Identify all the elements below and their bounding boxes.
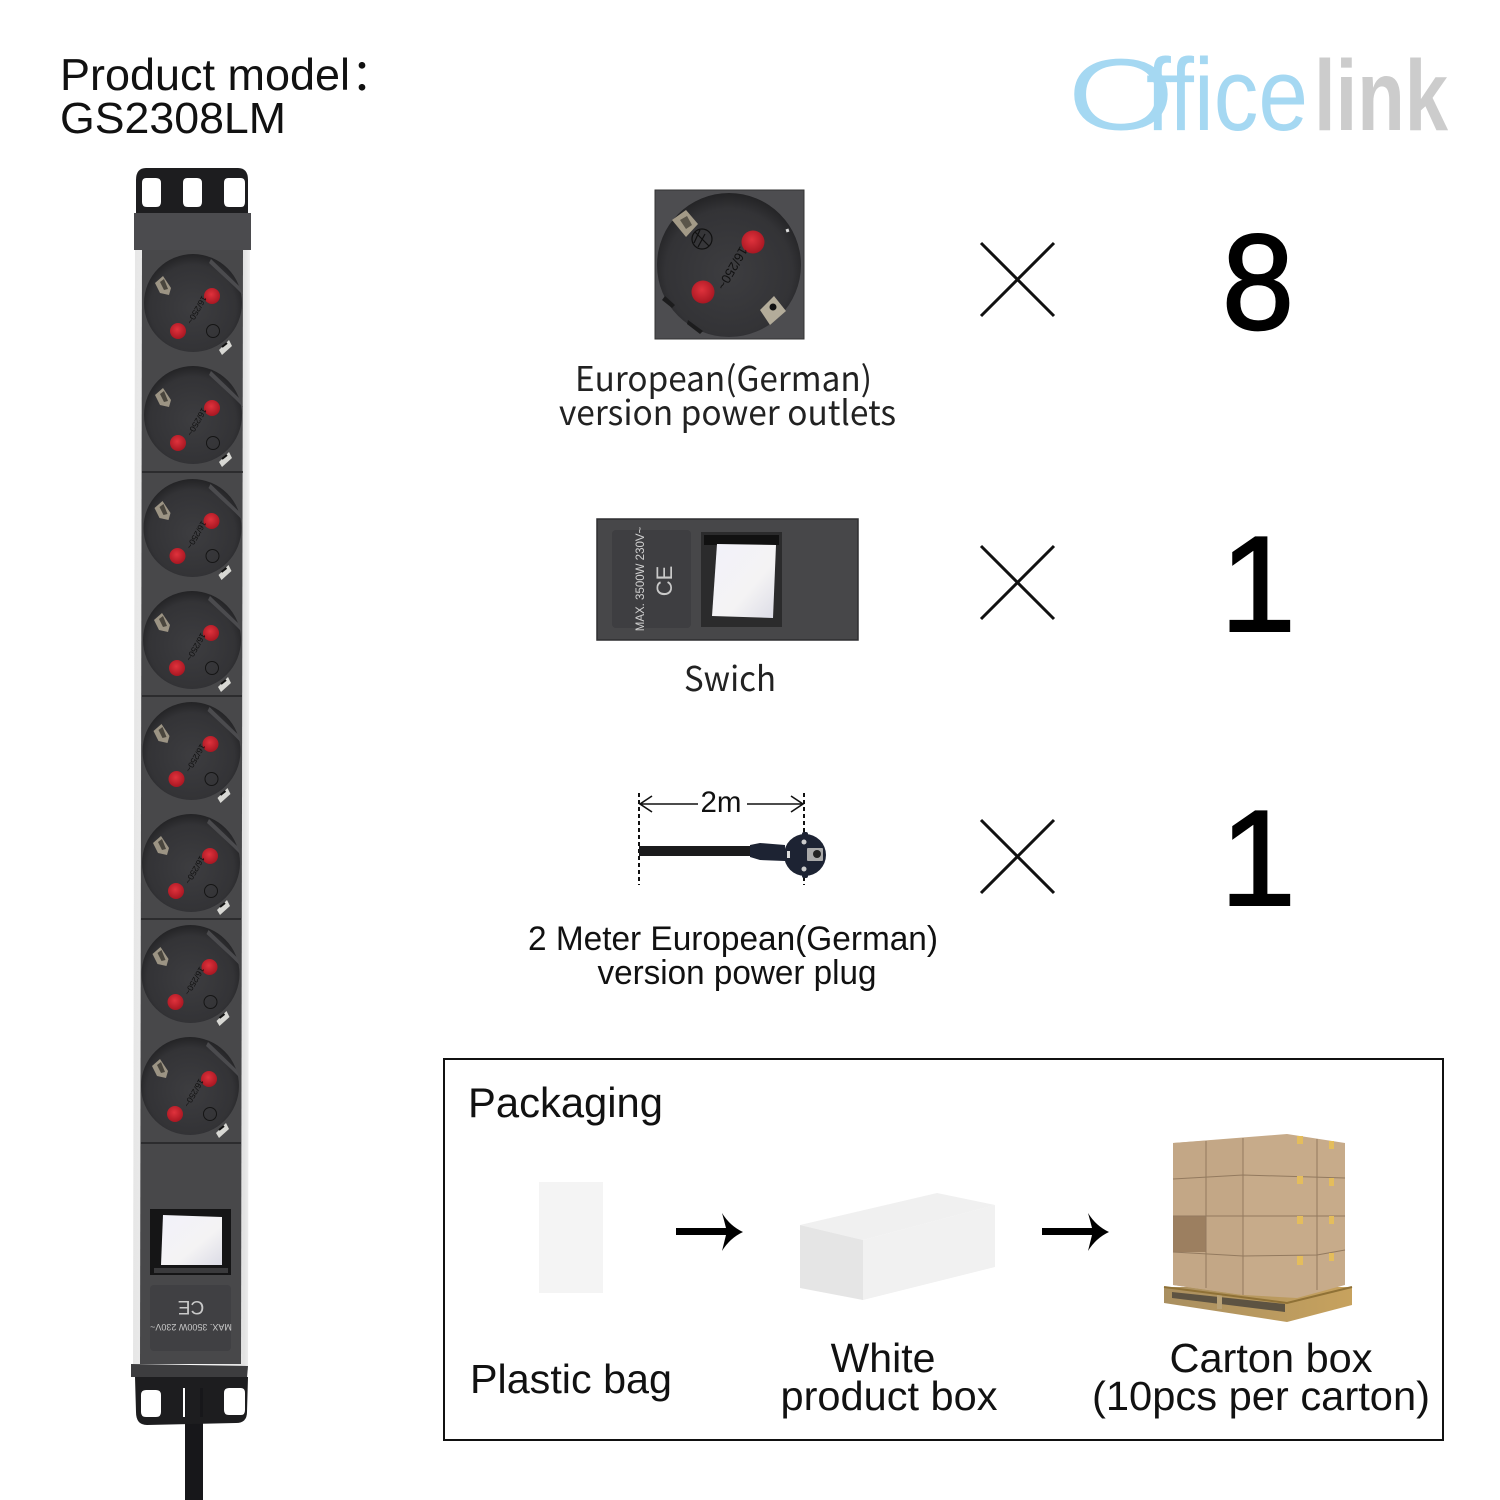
label: plug [528,920,938,992]
title: product model: Product model [60,51,350,100]
cartons [1173,1134,1345,1298]
power cable [185,1386,203,1500]
row 2: switch image [597,519,858,640]
row 3: plug diagram [639,786,826,885]
count 1 (plug): 1 [1220,782,1296,934]
socket 1 [144,254,243,355]
multiply sign 2 [981,546,1054,619]
socket well [657,193,801,337]
earth clips [672,210,786,325]
top band [134,213,251,250]
title: product model [60,51,395,143]
arrow 2 [1042,1213,1109,1251]
socket 5 [142,702,242,803]
rocker recess [701,532,782,627]
socket 4 [143,591,242,692]
label: carton box: Carton box [1170,1335,1373,1381]
plug head [784,832,826,878]
product: power strip [131,168,251,1500]
logo: Officelink: O [1067,37,1175,152]
earth symbol [692,229,712,249]
count 1 (switch): 1 [1220,508,1296,660]
packaging heading: Packaging [468,1079,663,1126]
label: carton box [1092,1335,1430,1419]
CE label plate [612,530,691,628]
icon: white product box [800,1193,995,1300]
rating text: MAX. 3500W 230V~ [635,526,647,631]
logo: Officelink: ffice [1146,37,1308,152]
socket 2: 16/250~ [185,406,209,438]
count 8: 8 [1222,206,1294,358]
socket 3: 16/250~ [184,519,209,551]
cable [639,846,751,856]
socket 8: 16/250~ [182,1077,206,1109]
title: product model: ： [351,51,395,100]
label: white product box: White [831,1335,935,1381]
pallet [1164,1287,1352,1322]
label: plug: version power plug [598,954,876,992]
label: white product box: product box [780,1373,998,1419]
icon: carton pallet [1164,1134,1352,1322]
label: white product box [780,1335,998,1419]
contact pins [692,230,764,304]
socket 1: 16/250~ [185,294,209,326]
socket 2 [144,366,243,467]
socket 6: 16/250~ [183,854,207,886]
aluminium rail [133,245,250,1370]
socket 6 [142,814,241,915]
icon: plastic bag [539,1182,603,1293]
label: plastic bag: Plastic bag [470,1356,672,1402]
strain relief boot [750,843,785,861]
CE mark: CE [652,566,677,596]
socket 3 [144,479,242,580]
title: product model: GS2308LM [60,95,286,143]
multiply sign 3 [981,820,1054,893]
panel: packaging [444,1059,1443,1440]
socket 7 [142,925,240,1026]
logo: Officelink [1067,37,1448,152]
socket 4: 16/250~ [184,631,208,663]
label: plug: 2 Meter European(German) [528,920,938,958]
label: carton box: (10pcs per carton) [1092,1373,1430,1419]
length dimension [639,793,804,885]
label: German outlets: European(German) [575,352,872,401]
rocker button [712,544,776,618]
arrow 1 [676,1213,743,1251]
switch panel on strip: CE [178,1296,204,1317]
logo: Officelink: link [1314,40,1448,152]
socket 7: 16/250~ [182,965,207,997]
bottom band [131,1364,248,1378]
switch panel on strip [150,1209,232,1351]
top mounting bracket [136,168,248,215]
switch panel on strip: MAX. 3500W 230V~ [150,1322,232,1332]
row 1: German socket image [655,190,804,339]
strip body [140,250,243,1364]
bottom mounting bracket [135,1377,248,1425]
socket 5: 16/250~ [183,742,208,774]
label: German outlets [559,352,896,435]
row 3: plug diagram: 2m [701,786,741,819]
socket 8 [141,1037,240,1138]
label: switch: Swich [684,652,776,701]
rating text: 16/250~ [714,244,751,293]
label: German outlets: version power outlets [559,386,896,435]
multiply sign 1 [981,243,1054,316]
